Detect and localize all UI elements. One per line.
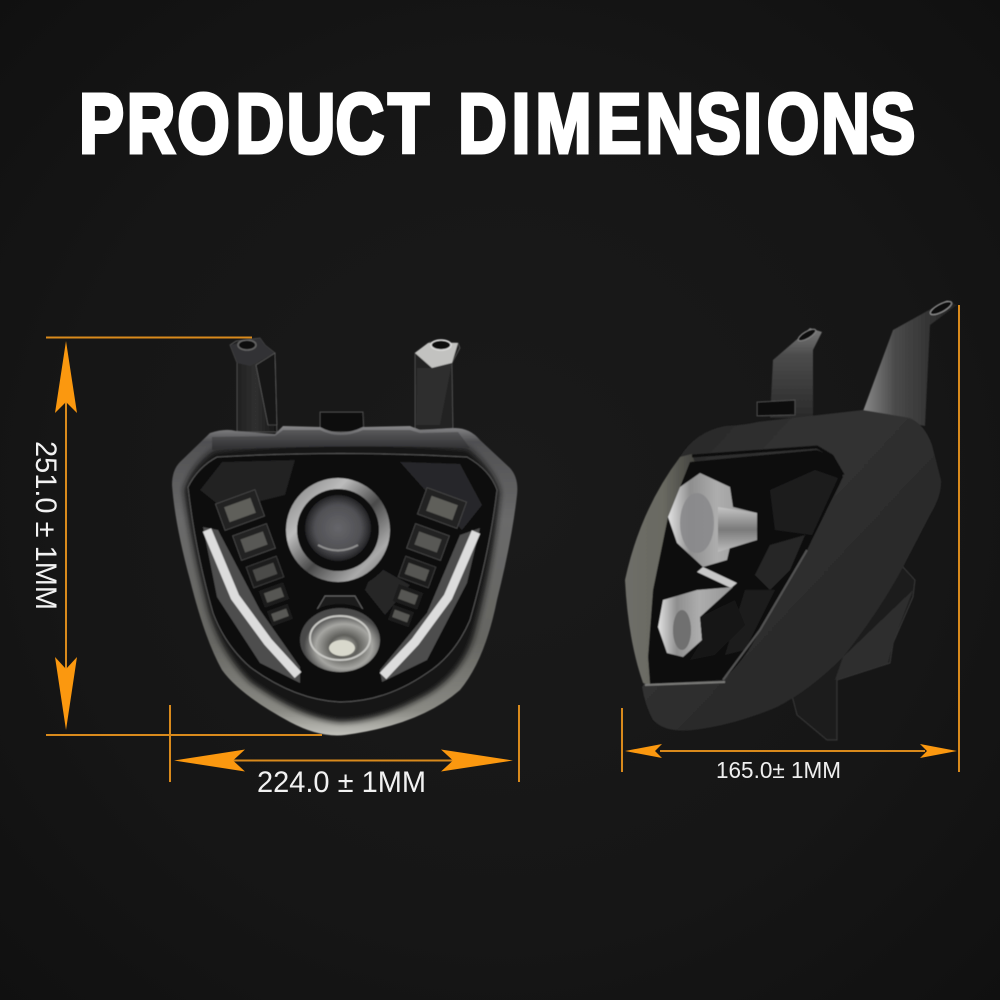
lens housing: [188, 454, 497, 702]
vertical arrow: [65, 400, 67, 670]
shell inner shading: [184, 442, 500, 722]
right daytime running light: [380, 528, 480, 682]
right LED modules: [388, 488, 467, 627]
horizontal arrow: [660, 750, 925, 752]
shell body: [642, 410, 941, 731]
horizontal arrow: [233, 760, 453, 762]
depth label: 165.0± 1MM: [716, 757, 841, 783]
connector tab: [757, 400, 795, 416]
interior reflections: [770, 470, 838, 535]
chrome link: [697, 567, 737, 588]
tall bracket: [862, 299, 957, 426]
extension lines: [46, 338, 322, 735]
rear lower housing: [780, 567, 915, 740]
housing facet: [835, 590, 913, 680]
low projector: [294, 596, 386, 680]
left daytime running light: [203, 527, 300, 683]
clear lens band: [625, 454, 700, 685]
width label: 224.0 ± 1MM: [257, 766, 426, 799]
left mounting bracket: [230, 338, 277, 432]
top shell band: [212, 430, 470, 450]
upper projector: [668, 473, 757, 567]
lower projector: [658, 587, 745, 660]
dimension: height 251.0: [29, 338, 322, 735]
dimension: depth 165.0: [622, 305, 959, 783]
lens edge highlight: [723, 550, 807, 680]
left LED modules: [215, 490, 293, 626]
main projector: [278, 470, 398, 590]
side view headlight: [625, 299, 957, 740]
interior reflections: [200, 460, 295, 510]
lens lower rim: [645, 682, 725, 685]
extension ticks: [170, 705, 519, 782]
title: PRODUCT DIMENSIONS: [79, 77, 915, 171]
dimension: width 224.0: [170, 705, 519, 799]
height label: 251.0 ± 1MM: [29, 441, 62, 610]
connector tab: [320, 412, 364, 432]
right mounting bracket: [415, 340, 460, 430]
front view headlight: [172, 338, 517, 735]
outer shell: [172, 426, 517, 735]
extension ticks: [622, 305, 959, 772]
lens interior: [648, 450, 843, 684]
top dark trim: [692, 447, 843, 475]
short bracket: [770, 327, 822, 418]
